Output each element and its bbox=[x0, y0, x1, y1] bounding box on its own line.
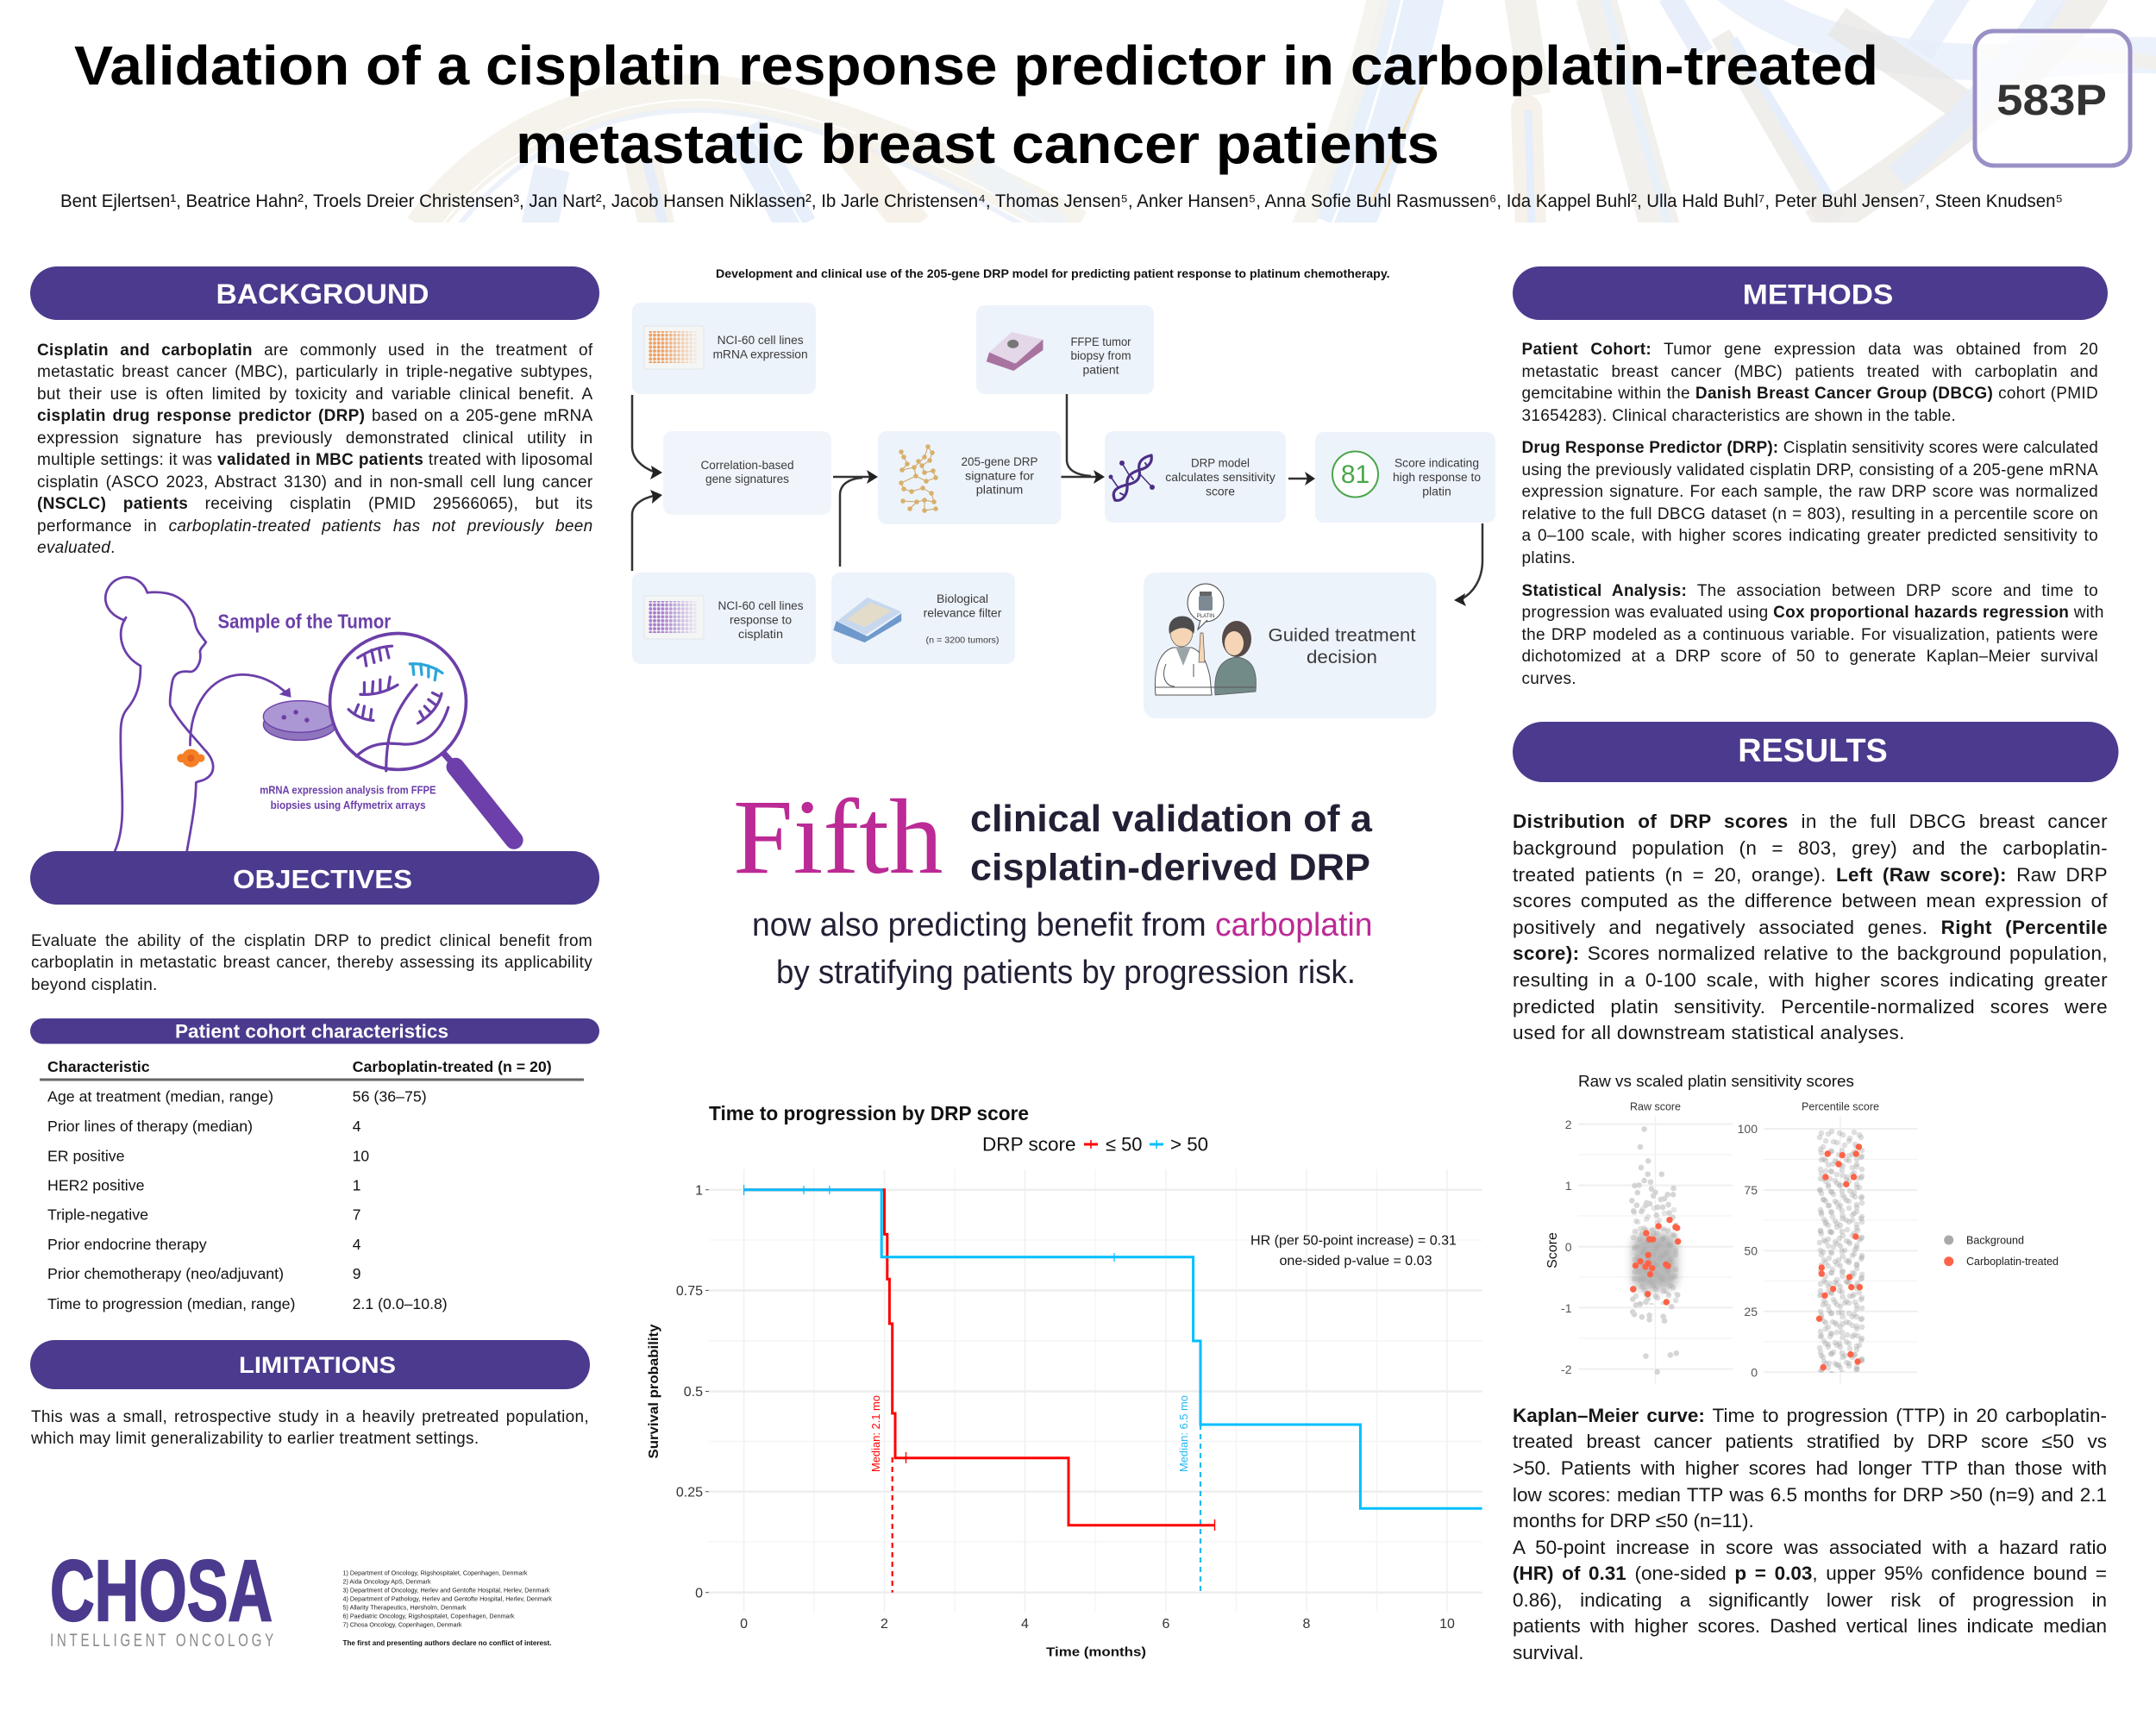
box: score 81 bbox=[1315, 432, 1495, 523]
text: methods drug response predictor: relative to the full DBCG dataset (n = 803), resulting in a percentile score on bbox=[1521, 505, 2098, 523]
median labels: Median: 2.1 mo bbox=[870, 1395, 882, 1472]
x axis labels: 8 bbox=[1303, 1617, 1311, 1632]
heading: objectives: OBJECTIVES bbox=[233, 864, 412, 894]
blue curve DRP above 50 bbox=[744, 1185, 1482, 1508]
box: NCI-60 mRNA expression: mRNA expression bbox=[713, 348, 808, 361]
text: background: evaluated. bbox=[37, 539, 116, 557]
x axis labels: 4 bbox=[1021, 1617, 1029, 1632]
logo: CHOSA Intelligent Oncology: CHOSA bbox=[50, 1543, 273, 1639]
illustration: tumour sampling and magnifier bbox=[105, 577, 514, 851]
box: correlation-based gene signatures bbox=[663, 431, 831, 515]
text: methods drug response predictor: using the previously validated cisplatin DRP, consisting of a 205-gene mRNA bbox=[1521, 461, 2098, 479]
box: NCI-60 cisplatin response: response to bbox=[730, 613, 792, 626]
blue RNA strand bbox=[410, 664, 442, 680]
scatter legend: Background bbox=[1966, 1235, 2024, 1247]
carboplatin-treated points bbox=[1633, 1147, 1859, 1368]
workflow caption: Development and clinical use of the 205-gene DRP model for predicting patient response to platinum chemotherapy. bbox=[716, 267, 1390, 280]
table rows: Time to progression (median, range) bbox=[47, 1295, 295, 1312]
table rows: 9 bbox=[353, 1265, 360, 1282]
table rows: Prior chemotherapy (neo/adjuvant) bbox=[47, 1265, 284, 1282]
author list: Bent Ejlertsen¹, Beatrice Hahn², Troels Dreier Christensen³, Jan Nart², Jacob Hansen Niklassen², Ib Jarle Christensen⁴, Thomas Jensen⁵, Anker Hansen⁵, Anna Sofie Buhl Rasmussen⁶, Ida Kappel Buhl², Ulla Hald Buhl⁷, Peter Buhl Jensen⁷, Steen Knudsen⁵ bbox=[60, 191, 2063, 211]
text: Kaplan-Meier results: 0.86), indicating a significantly lower risk of progression in bbox=[1513, 1589, 2107, 1611]
heading: results: RESULTS bbox=[1738, 733, 1888, 769]
text: methods statistical analysis bbox=[1521, 581, 2104, 688]
box: DRP model: calculates sensitivity bbox=[1165, 471, 1275, 484]
table rows: 10 bbox=[353, 1147, 369, 1164]
box: score 81: high response to bbox=[1393, 471, 1481, 484]
text: methods statistical analysis: Statistical Analysis: The association between DRP score and time to bbox=[1521, 581, 2098, 600]
table rows: 1 bbox=[353, 1176, 360, 1193]
text: methods statistical analysis: the DRP modeled as a continuous variable. For visualization, patients were bbox=[1521, 626, 2098, 643]
text: results distribution: resulting in a 0-100 scale, with higher scores indicating greater bbox=[1513, 969, 2108, 991]
text: methods statistical analysis: curves. bbox=[1521, 669, 1576, 688]
array analysis caption bbox=[260, 783, 436, 811]
box: score 81: platin bbox=[1422, 485, 1451, 498]
heading: limitations bbox=[30, 1340, 590, 1389]
facet labels: Percentile score bbox=[1802, 1101, 1879, 1113]
text: methods drug response predictor bbox=[1521, 439, 2098, 567]
y axis labels bbox=[676, 1183, 703, 1600]
axis ticks percentile: 25 bbox=[1744, 1305, 1758, 1319]
callout: fifth clinical validation: now also predicting benefit from carboplatin bbox=[752, 907, 1373, 943]
facet labels: Raw score bbox=[1630, 1101, 1681, 1113]
affiliations and disclosure bbox=[343, 1569, 552, 1647]
text: results distribution: background population (n = 803, grey) and the carboplatin- bbox=[1513, 837, 2108, 859]
affiliations and disclosure: The first and presenting authors declare no conflict of interest. bbox=[343, 1638, 552, 1647]
chart legend: > 50 bbox=[1170, 1134, 1208, 1156]
body outline bbox=[105, 577, 289, 851]
box: 205-gene DRP signature: signature for bbox=[965, 469, 1035, 482]
axis ticks raw: 0 bbox=[1565, 1240, 1572, 1254]
chart: Kaplan-Meier time to progression bbox=[647, 1102, 1482, 1659]
scatter axis title: Score bbox=[1545, 1232, 1560, 1268]
callout: fifth clinical validation: clinical validation of a bbox=[970, 798, 1373, 840]
box: 205-gene DRP signature: platinum bbox=[976, 484, 1023, 497]
median labels: Median: 6.5 mo bbox=[1178, 1395, 1190, 1472]
poster title: Validation of a cisplatin response predictor in carboplatin-treated bbox=[74, 34, 1878, 97]
text: limitations: This was a small, retrospective study in a heavily pretreated population, bbox=[31, 1408, 589, 1426]
box: DRP model bbox=[1105, 431, 1286, 523]
affiliations and disclosure: 5) Allarity Therapeutics, Hørsholm, Denmark bbox=[343, 1603, 467, 1611]
box: correlation-based gene signatures: Correlation-based bbox=[700, 459, 793, 472]
text: background: multiple settings: it was validated in MBC patients treated with liposomal bbox=[37, 451, 593, 469]
sample label: Sample of the Tumor bbox=[218, 611, 391, 633]
box: biological relevance filter: (n = 3200 tumors) bbox=[926, 636, 999, 645]
text: background: cisplatin drug response predictor (DRP) based on a 205-gene mRNA bbox=[37, 407, 593, 425]
text: results distribution: positively and negatively associated genes. Right (Percentile bbox=[1513, 917, 2108, 938]
axis titles: Time (months) bbox=[1046, 1645, 1146, 1659]
x axis labels: 0 bbox=[740, 1617, 748, 1632]
text: methods statistical analysis: progression was evaluated using Cox proportional hazards regression with bbox=[1521, 604, 2104, 622]
text: background: metastatic breast cancer (MBC), particularly in triple-negative subtypes, bbox=[37, 363, 593, 381]
scatter legend: Carboplatin-treated bbox=[1966, 1256, 2059, 1268]
array analysis caption: mRNA expression analysis from FFPE bbox=[260, 783, 436, 796]
hazard ratio annotation bbox=[1250, 1233, 1457, 1268]
poster title: metastatic breast cancer patients bbox=[516, 113, 1439, 175]
y axis labels: 0.25 bbox=[676, 1485, 703, 1500]
decorative DNA helix header image bbox=[423, 0, 2156, 228]
table rows: ER positive bbox=[47, 1147, 124, 1164]
text: results distribution: predicted platin sensitivity. Percentile-normalized scores were bbox=[1513, 996, 2108, 1018]
table rows: 2.1 (0.0–10.8) bbox=[353, 1295, 448, 1312]
median dashed lines bbox=[893, 1425, 1200, 1593]
text: methods drug response predictor: expression signature. For each sample, the raw DRP score was normalized bbox=[1521, 483, 2098, 501]
text: methods statistical analysis: dichotomized at a DRP score of 50 to generate Kaplan–Meier survival bbox=[1521, 648, 2098, 666]
affiliations and disclosure: 2) Aida Oncology ApS, Denmark bbox=[343, 1577, 431, 1585]
box: 205-gene DRP signature: 205-gene DRP bbox=[961, 455, 1038, 468]
text: objectives bbox=[31, 931, 592, 993]
affiliations and disclosure: 1) Department of Oncology, Rigshospitalet, Copenhagen, Denmark bbox=[343, 1569, 528, 1576]
grid bbox=[705, 1169, 1482, 1612]
table rows: 4 bbox=[353, 1118, 361, 1135]
workflow diagram bbox=[632, 267, 1495, 718]
table heading bbox=[30, 1018, 599, 1043]
box: FFPE tumor biopsy bbox=[976, 305, 1154, 394]
scatter legend bbox=[1944, 1235, 2059, 1268]
text: methods patient cohort: metastatic breast cancer (MBC) patients treated with carboplatin and bbox=[1521, 363, 2098, 381]
chart legend bbox=[982, 1134, 1208, 1156]
axis ticks raw bbox=[1561, 1118, 1572, 1376]
panel grid bbox=[1578, 1117, 1918, 1384]
text: limitations bbox=[31, 1408, 589, 1448]
box: FFPE tumor biopsy: patient bbox=[1083, 364, 1119, 376]
poster number badge bbox=[1975, 31, 2130, 166]
text: Kaplan-Meier results: Kaplan–Meier curve: Time to progression (TTP) in 20 carboplatin- bbox=[1513, 1405, 2107, 1426]
table rows: HER2 positive bbox=[47, 1176, 145, 1193]
poster title bbox=[74, 34, 1878, 175]
affiliations and disclosure: 3) Department of Oncology, Herlev and Gentofte Hospital, Herlev, Denmark bbox=[343, 1586, 550, 1594]
text: Kaplan-Meier results: treated breast cancer patients stratified by DRP score ≤50 vs bbox=[1513, 1431, 2107, 1452]
text: background: Cisplatin and carboplatin are commonly used in the treatment of bbox=[37, 341, 592, 360]
magnifier lens bbox=[330, 634, 466, 769]
box: score 81: Score indicating bbox=[1395, 457, 1479, 470]
chart: raw vs scaled sensitivity scores bbox=[1545, 1072, 2059, 1384]
text: Kaplan-Meier results: low scores: median TTP was 6.5 months for DRP >50 (n=9) and 2.1 bbox=[1513, 1484, 2107, 1506]
table rows: Triple-negative bbox=[47, 1206, 148, 1223]
chart: Kaplan-Meier time to progression: Survival probability bbox=[647, 1324, 661, 1459]
box: FFPE tumor biopsy: biopsy from bbox=[1071, 349, 1131, 362]
text: Kaplan-Meier results bbox=[1513, 1405, 2107, 1663]
magnifier handle bbox=[442, 751, 514, 840]
arrow head to dish bbox=[279, 687, 291, 698]
table rows: Prior lines of therapy (median) bbox=[47, 1118, 253, 1135]
y axis labels: 1 bbox=[695, 1183, 703, 1199]
text: background: (NSCLC) patients receiving cisplatin (PMID 29566065), but its bbox=[37, 495, 593, 513]
chart legend: ≤ 50 bbox=[1106, 1134, 1142, 1156]
axis ticks percentile: 100 bbox=[1738, 1122, 1758, 1136]
hazard ratio annotation: HR (per 50-point increase) = 0.31 bbox=[1250, 1233, 1457, 1249]
icon: doctor and patient: PLATIN bbox=[1197, 614, 1214, 619]
column headers: Characteristic bbox=[47, 1058, 150, 1075]
scatter title: Raw vs scaled platin sensitivity scores bbox=[1578, 1072, 1854, 1090]
axis ticks raw: 1 bbox=[1565, 1179, 1572, 1193]
axis ticks percentile: 75 bbox=[1744, 1183, 1758, 1197]
text: background: cisplatin (ASCO 2023, Abstract 3130) and in non-small cell lung cancer bbox=[37, 473, 593, 492]
box: score 81: 81 bbox=[1341, 460, 1369, 489]
box: NCI-60 cisplatin response bbox=[632, 573, 816, 664]
axis ticks percentile bbox=[1738, 1122, 1758, 1380]
facet labels bbox=[1630, 1101, 1879, 1113]
RNA strands bbox=[348, 646, 448, 771]
box: FFPE tumor biopsy: FFPE tumor bbox=[1071, 335, 1131, 348]
arrows bbox=[632, 394, 1482, 606]
axis ticks percentile: 50 bbox=[1744, 1243, 1758, 1257]
callout: fifth clinical validation: Fifth bbox=[733, 778, 943, 896]
text: Kaplan-Meier results: survival. bbox=[1513, 1642, 1584, 1663]
text: results distribution: Distribution of DRP scores in the full DBCG breast cancer bbox=[1513, 811, 2108, 832]
text: Kaplan-Meier results: patients with higher scores. Dashed vertical lines indicate median bbox=[1513, 1615, 2107, 1637]
column headers: Carboplatin-treated (n = 20) bbox=[353, 1058, 552, 1075]
y axis labels: 0 bbox=[695, 1587, 703, 1600]
text: results distribution: score): Scores normalized relative to the background population, bbox=[1513, 943, 2108, 964]
text: background bbox=[37, 341, 593, 557]
text: results distribution: used for all downstream statistical analyses. bbox=[1513, 1022, 1905, 1043]
text: Kaplan-Meier results: (HR) of 0.31 (one-sided p = 0.03, upper 95% confidence bound = bbox=[1513, 1563, 2107, 1584]
affiliations and disclosure: 6) Paediatric Oncology, Rigshospitalet, Copenhagen, Denmark bbox=[343, 1612, 515, 1619]
poster number badge: 583P bbox=[1996, 76, 2107, 124]
text: objectives: Evaluate the ability of the cisplatin DRP to predict clinical benefit from bbox=[31, 931, 592, 950]
x axis labels: 6 bbox=[1163, 1617, 1170, 1632]
text: Kaplan-Meier results: months for DRP ≤50 (n=11). bbox=[1513, 1510, 1754, 1531]
callout: fifth clinical validation: cisplatin-derived DRP bbox=[970, 847, 1370, 888]
text: methods drug response predictor: platins. bbox=[1521, 549, 1576, 567]
table rows: 56 (36–75) bbox=[353, 1088, 427, 1106]
patient cohort table bbox=[30, 1018, 599, 1312]
box: NCI-60 mRNA expression: NCI-60 cell lines bbox=[718, 334, 804, 347]
box: DRP model: score bbox=[1206, 485, 1235, 498]
callout: fifth clinical validation bbox=[733, 778, 1373, 991]
text: limitations: which may limit generalizability to earlier treatment settings. bbox=[31, 1430, 479, 1448]
percentile background points bbox=[1816, 1128, 1865, 1373]
text: results distribution: scores computed as the difference between mean expression of bbox=[1513, 890, 2108, 911]
raw score background points bbox=[1630, 1129, 1680, 1372]
decision label: Guided treatment bbox=[1268, 625, 1416, 645]
text: objectives: beyond cisplatin. bbox=[31, 976, 158, 993]
box: DRP model: DRP model bbox=[1191, 457, 1250, 470]
array analysis caption: biopsies using Affymetrix arrays bbox=[271, 799, 426, 811]
y axis labels: 0.5 bbox=[684, 1385, 703, 1400]
axis ticks percentile: 0 bbox=[1751, 1366, 1758, 1380]
box: guided treatment decision: decision bbox=[1307, 648, 1377, 667]
heading: methods: METHODS bbox=[1743, 279, 1893, 310]
petri dish bbox=[263, 701, 336, 740]
box: 205-gene DRP signature bbox=[878, 431, 1061, 524]
heading: background bbox=[30, 266, 599, 320]
text: methods patient cohort: gemcitabine within the Danish Breast Cancer Group (DBCG) cohort (PMID bbox=[1521, 385, 2098, 403]
text: results distribution bbox=[1513, 811, 2108, 1043]
callout: fifth clinical validation: by stratifying patients by progression risk. bbox=[776, 955, 1356, 991]
text: methods drug response predictor: Drug Response Predictor (DRP): Cisplatin sensitivity scores were calculated bbox=[1521, 439, 2098, 457]
box: NCI-60 cisplatin response: cisplatin bbox=[738, 628, 783, 641]
heading: objectives bbox=[30, 851, 599, 905]
affiliations and disclosure: 7) Chosa Oncology, Copenhagen, Denmark bbox=[343, 1620, 462, 1628]
text: methods patient cohort bbox=[1521, 341, 2098, 425]
text: methods drug response predictor: a 0–100 scale, with higher scores indicating greater predicted sensitivity to bbox=[1521, 527, 2098, 545]
table rows bbox=[47, 1088, 448, 1312]
affiliations and disclosure: 4) Department of Pathology, Herlev and Gentofte Hospital, Herlev, Denmark bbox=[343, 1594, 552, 1602]
table heading: Patient cohort characteristics bbox=[175, 1021, 448, 1042]
icon: doctor and patient bbox=[1155, 584, 1257, 695]
median labels bbox=[870, 1395, 1190, 1472]
text: results distribution: treated patients (n = 20, orange). Left (Raw score): Raw DRP bbox=[1513, 864, 2108, 886]
tumour bbox=[177, 749, 204, 767]
logo: CHOSA Intelligent Oncology bbox=[50, 1543, 273, 1650]
box: guided treatment decision bbox=[1144, 573, 1437, 718]
heading: limitations: LIMITATIONS bbox=[239, 1352, 396, 1378]
axis ticks raw: -1 bbox=[1561, 1301, 1572, 1315]
text: background: but their use is often limited by toxicity and variable clinical benefit. A bbox=[37, 385, 593, 404]
text: methods patient cohort: Patient Cohort: Tumor gene expression data was obtained from 20 bbox=[1521, 341, 2098, 359]
x axis labels bbox=[740, 1617, 1455, 1632]
table rows: 7 bbox=[353, 1206, 360, 1223]
table rows: 4 bbox=[353, 1236, 361, 1253]
text: background: performance in carboplatin-treated patients has not previously been bbox=[37, 517, 593, 536]
box: NCI-60 cisplatin response: NCI-60 cell lines bbox=[718, 599, 804, 612]
table rows: Prior endocrine therapy bbox=[47, 1236, 207, 1253]
heading: results bbox=[1513, 722, 2118, 782]
text: Kaplan-Meier results: >50. Patients with higher scores had longer TTP than those with bbox=[1513, 1457, 2107, 1479]
box: correlation-based gene signatures: gene signatures bbox=[705, 473, 789, 485]
text: background: expression signature has previously demonstrated clinical utility in bbox=[37, 429, 593, 448]
logo: CHOSA Intelligent Oncology: INTELLIGENT ONCOLOGY bbox=[50, 1629, 273, 1650]
x axis labels: 2 bbox=[881, 1617, 888, 1632]
axis ticks raw: 2 bbox=[1565, 1118, 1572, 1131]
text: methods patient cohort: 31654283). Clinical characteristics are shown in the table. bbox=[1521, 407, 1956, 425]
chart legend: DRP score bbox=[982, 1134, 1076, 1156]
hazard ratio annotation: one-sided p-value = 0.03 bbox=[1280, 1254, 1432, 1268]
box: biological relevance filter: relevance filter bbox=[924, 607, 1002, 619]
text: objectives: carboplatin in metastatic breast cancer, thereby assessing its applicability bbox=[31, 954, 592, 972]
box: biological relevance filter bbox=[831, 573, 1015, 664]
column headers bbox=[47, 1058, 552, 1075]
chart title: Time to progression by DRP score bbox=[709, 1102, 1029, 1124]
axis ticks raw: -2 bbox=[1561, 1362, 1572, 1376]
heading: background: BACKGROUND bbox=[216, 279, 429, 310]
y axis labels: 0.75 bbox=[676, 1284, 703, 1299]
box: biological relevance filter: Biological bbox=[937, 592, 988, 605]
box: NCI-60 mRNA expression bbox=[632, 303, 816, 394]
x axis labels: 10 bbox=[1439, 1617, 1455, 1632]
table rows: Age at treatment (median, range) bbox=[47, 1088, 273, 1106]
heading: methods bbox=[1513, 266, 2108, 320]
text: Kaplan-Meier results: A 50-point increase in score was associated with a hazard ratio bbox=[1513, 1537, 2107, 1558]
red curve DRP at most 50 bbox=[744, 1190, 1214, 1531]
